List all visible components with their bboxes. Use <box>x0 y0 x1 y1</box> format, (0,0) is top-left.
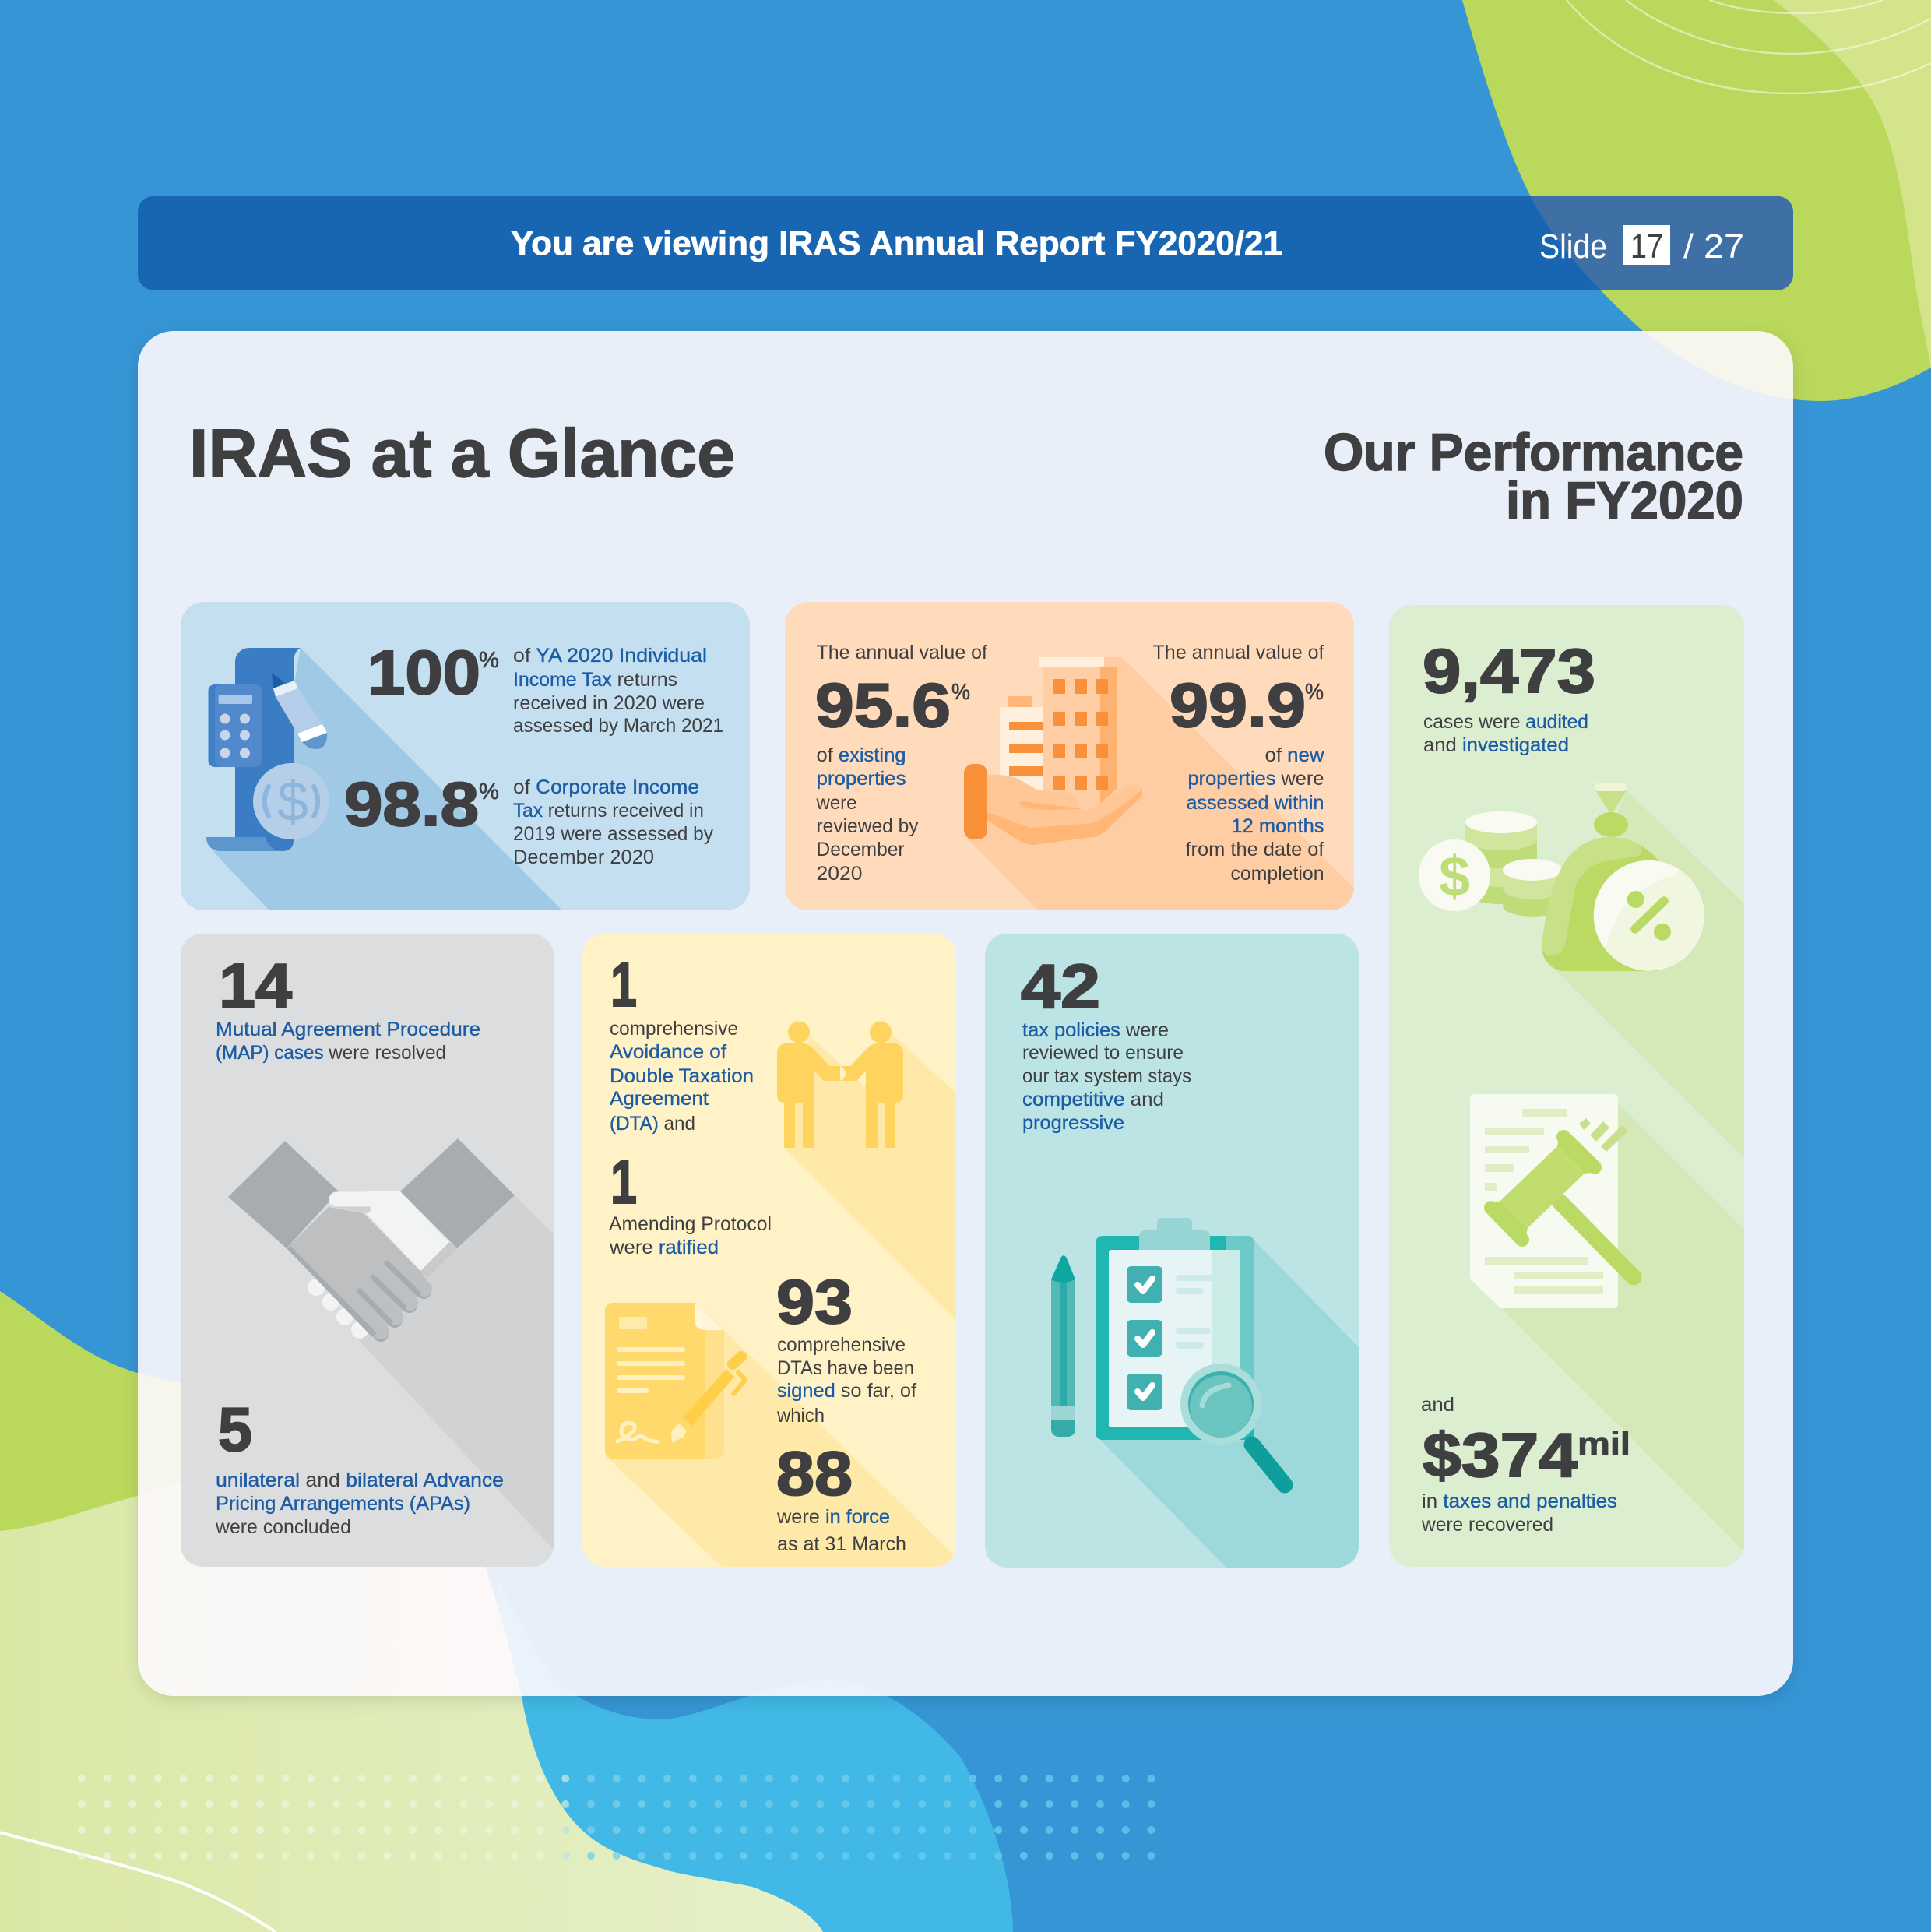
icon: money bag and coins: $ <box>1439 846 1470 908</box>
stat: 42: reviewed to ensure <box>1022 1042 1184 1064</box>
panel: income tax assessment <box>181 602 750 910</box>
stat: 99.9%: completion <box>1230 863 1324 885</box>
top right green blob <box>1462 0 1931 401</box>
stat: 95.6% <box>815 642 987 885</box>
panel: double taxation agreements <box>582 934 956 1567</box>
top right light blob <box>1774 0 1931 368</box>
stat: 9,473: cases were audited <box>1423 711 1588 733</box>
stat: 93 DTAs signed: signed so far, of <box>777 1380 916 1402</box>
stat: 5: Pricing Arrangements (APAs) <box>216 1493 470 1515</box>
stat: 1 amending protocol: were ratified <box>609 1237 719 1258</box>
stat: 42: competitive and <box>1022 1089 1164 1110</box>
bottom light green blob <box>0 1466 823 1932</box>
stat: 98.8%: Tax returns received in <box>513 800 704 822</box>
slide counter: Slide <box>1539 227 1607 266</box>
stat: 42: progressive <box>1022 1112 1124 1134</box>
contour arcs <box>1567 0 1931 93</box>
stat: 93 DTAs signed: comprehensive <box>777 1334 906 1356</box>
stat: 98.8%: December 2020 <box>513 846 654 868</box>
bottom left curve <box>0 1832 276 1932</box>
stat: 88 in force: as at 31 March <box>777 1533 906 1555</box>
panel: property valuation <box>785 602 1354 910</box>
stat: 88 in force: 88 <box>776 1439 853 1508</box>
icon: tax document with calculator, pencil and coin <box>206 648 329 851</box>
stat: 99.9%: The annual value of <box>1152 642 1324 663</box>
icon: tax document with calculator, pencil and coin: $ <box>277 771 308 833</box>
bottom cyan blob <box>467 1581 1013 1932</box>
stat: 1 amending protocol: 1 <box>610 1147 637 1216</box>
slide counter: 17 <box>1630 227 1663 266</box>
stat: 95.6%: of existing <box>816 744 906 766</box>
stat: 5: were concluded <box>215 1516 351 1538</box>
stat: 95.6%: were <box>816 792 856 814</box>
stat: 99.9%: 12 months <box>1232 815 1324 837</box>
panel: mutual agreement procedure <box>181 934 554 1567</box>
icon: signed document with pen <box>605 1303 745 1459</box>
stat: 9,473: 9,473 <box>1423 636 1595 706</box>
stat: 100%: of YA 2020 Individual <box>513 645 707 667</box>
stat: 9,473 <box>1423 636 1595 756</box>
stat: $374 mil: and <box>1421 1394 1454 1416</box>
stat: 98.8% <box>344 769 713 868</box>
icon: clipboard checklist <box>1096 1218 1254 1440</box>
stat: 98.8%: % <box>479 779 499 804</box>
stat: 88 in force: were in force <box>776 1506 890 1528</box>
stat: 95.6%: % <box>951 680 970 705</box>
stat: 95.6%: 95.6 <box>815 670 951 740</box>
stat: 95.6%: reviewed by <box>816 815 919 837</box>
subtitle: Our Performance <box>1324 423 1743 482</box>
stat: 98.8%: 98.8 <box>344 769 479 839</box>
stat: 100%: Income Tax returns <box>513 669 677 691</box>
icon: money bag and coins <box>1419 783 1704 971</box>
stat: 93 DTAs signed <box>776 1267 916 1427</box>
stat: 95.6%: 2020 <box>816 863 863 885</box>
subtitle <box>1324 423 1743 530</box>
stat: 99.9%: % <box>1305 680 1324 705</box>
main panel background <box>138 331 1793 1696</box>
dot grid <box>82 1779 1152 1856</box>
subtitle: in FY2020 <box>1506 471 1743 530</box>
slide counter: / 27 <box>1683 227 1744 266</box>
stat: $374 mil <box>1421 1394 1630 1536</box>
stat: 42: tax policies were <box>1022 1019 1169 1041</box>
stat: 5: 5 <box>218 1395 252 1464</box>
stat: $374 mil: were recovered <box>1421 1514 1553 1536</box>
stat: 99.9%: assessed within <box>1187 792 1324 814</box>
stat: 93 DTAs signed: DTAs have been <box>777 1357 914 1379</box>
stat: 42: 42 <box>1021 952 1100 1021</box>
stat: 99.9%: of new <box>1264 744 1324 766</box>
stat: 1 comprehensive DTA: 1 <box>610 950 637 1019</box>
stat: 1 comprehensive DTA: Avoidance of <box>610 1041 726 1063</box>
stat: 100%: assessed by March 2021 <box>513 715 723 737</box>
panel: tax policies <box>985 934 1359 1568</box>
stat: 98.8%: of Corporate Income <box>513 776 699 798</box>
title: IRAS at a Glance <box>189 416 735 491</box>
stat: 14: Mutual Agreement Procedure <box>216 1019 480 1040</box>
stat: 9,473: and investigated <box>1423 734 1569 756</box>
icon: two people shaking hands <box>777 1022 903 1148</box>
stat: 99.9%: properties were <box>1188 768 1324 790</box>
stat: 14: 14 <box>219 951 293 1020</box>
stat: 99.9% <box>1152 642 1324 885</box>
stat: 95.6%: The annual value of <box>816 642 987 663</box>
stat: 1 comprehensive DTA: (DTA) and <box>610 1113 695 1135</box>
stat: 42: our tax system stays <box>1022 1065 1191 1087</box>
header bar <box>138 196 1793 290</box>
stat: 93 DTAs signed: which <box>776 1405 825 1427</box>
stat: 99.9%: from the date of <box>1185 839 1324 860</box>
stat: $374 mil: in taxes and penalties <box>1422 1490 1617 1512</box>
stat: 93 DTAs signed: 93 <box>776 1267 853 1336</box>
left dark green blob <box>0 1291 389 1550</box>
stat: 88 in force <box>776 1439 906 1555</box>
stat: 100%: % <box>479 648 499 673</box>
icon: hand holding buildings <box>964 657 1142 845</box>
stat: 98.8%: 2019 were assessed by <box>513 823 713 845</box>
stat: $374 mil: $374 <box>1423 1420 1578 1490</box>
stat: $374 mil: mil <box>1578 1425 1630 1462</box>
stat: 100% <box>368 638 723 737</box>
panel: audits and recoveries <box>1389 605 1744 1567</box>
stat: 1 amending protocol: Amending Protocol <box>609 1213 772 1235</box>
stat: 1 comprehensive DTA <box>610 950 754 1135</box>
stat: 1 comprehensive DTA: Agreement <box>610 1088 709 1110</box>
stat: 42 <box>1021 952 1191 1134</box>
stat: 1 comprehensive DTA: Double Taxation <box>610 1065 754 1087</box>
icon: handshake <box>228 1138 515 1342</box>
stat: 100%: 100 <box>368 638 480 707</box>
slide counter <box>1539 225 1744 266</box>
header title: You are viewing IRAS Annual Report FY2020/21 <box>511 224 1282 262</box>
icon: pencil <box>1051 1255 1075 1437</box>
stat: 5 <box>215 1395 504 1538</box>
stat: 5: unilateral and bilateral Advance <box>216 1469 504 1491</box>
icon: gavel on document <box>1470 1094 1634 1308</box>
stat: 1 amending protocol <box>609 1147 772 1258</box>
stat: 95.6%: December <box>816 839 905 860</box>
stat: 95.6%: properties <box>816 768 906 790</box>
stat: 14: (MAP) cases were resolved <box>216 1042 446 1064</box>
icon: magnifying glass <box>1180 1364 1285 1485</box>
stat: 100%: received in 2020 were <box>513 692 705 714</box>
stat: 1 comprehensive DTA: comprehensive <box>610 1018 738 1040</box>
stat: 99.9%: 99.9 <box>1170 670 1306 740</box>
stat: 14 <box>216 951 480 1064</box>
